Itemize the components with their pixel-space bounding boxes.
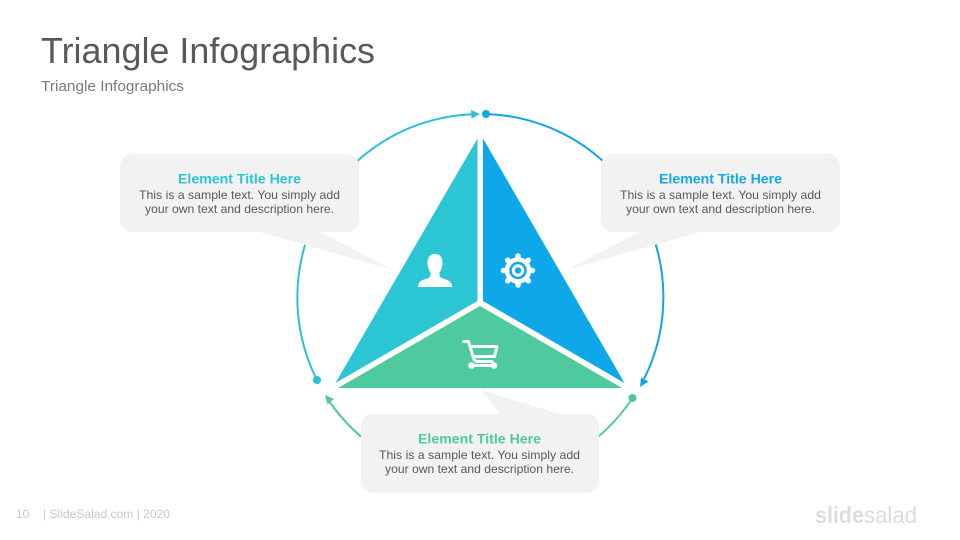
callout text: right line 1: This is a sample text. You simply add — [620, 188, 821, 202]
logo: slidesalad — [815, 502, 917, 528]
footer: page number: 10 — [16, 507, 30, 521]
callout text: left line 2: your own text and description here. — [145, 202, 334, 216]
callout text: bottom line 1: This is a sample text. You simply add — [379, 448, 580, 462]
title: Triangle Infographics — [41, 30, 375, 71]
cycle ring arcs with arrows and dots — [297, 110, 663, 480]
arc: left side to left dot — [297, 180, 340, 384]
triangle: teal left segment — [336, 138, 478, 383]
callout: bottom — [361, 390, 599, 493]
callout text: right line 2: your own text and description here. — [626, 202, 815, 216]
callout: right — [566, 154, 840, 270]
arc: top dot to right — [482, 110, 663, 387]
logo word: salad: salad — [864, 502, 917, 528]
icon: gear — [504, 256, 532, 285]
footer: source: | SlideSalad.com | 2020 — [43, 507, 170, 521]
triangle: green bottom segment — [338, 306, 622, 388]
callout text: left line 1: This is a sample text. You simply add — [139, 188, 340, 202]
triangle: blue right segment — [483, 138, 624, 383]
arc: bottom dot to bottom left arrow — [325, 394, 636, 480]
callout text: bottom line 2: your own text and description here. — [385, 462, 574, 476]
callout title: left: Element Title Here — [178, 170, 301, 186]
callout title: right: Element Title Here — [659, 170, 782, 186]
logo word: slide: slide — [815, 502, 864, 528]
callout title: bottom: Element Title Here — [418, 430, 541, 446]
icon: person — [418, 254, 452, 287]
arc: top left to top arrow — [348, 110, 480, 170]
subtitle: Triangle Infographics — [41, 78, 184, 95]
callout: left — [120, 154, 393, 270]
icon: shopping cart — [464, 342, 497, 367]
